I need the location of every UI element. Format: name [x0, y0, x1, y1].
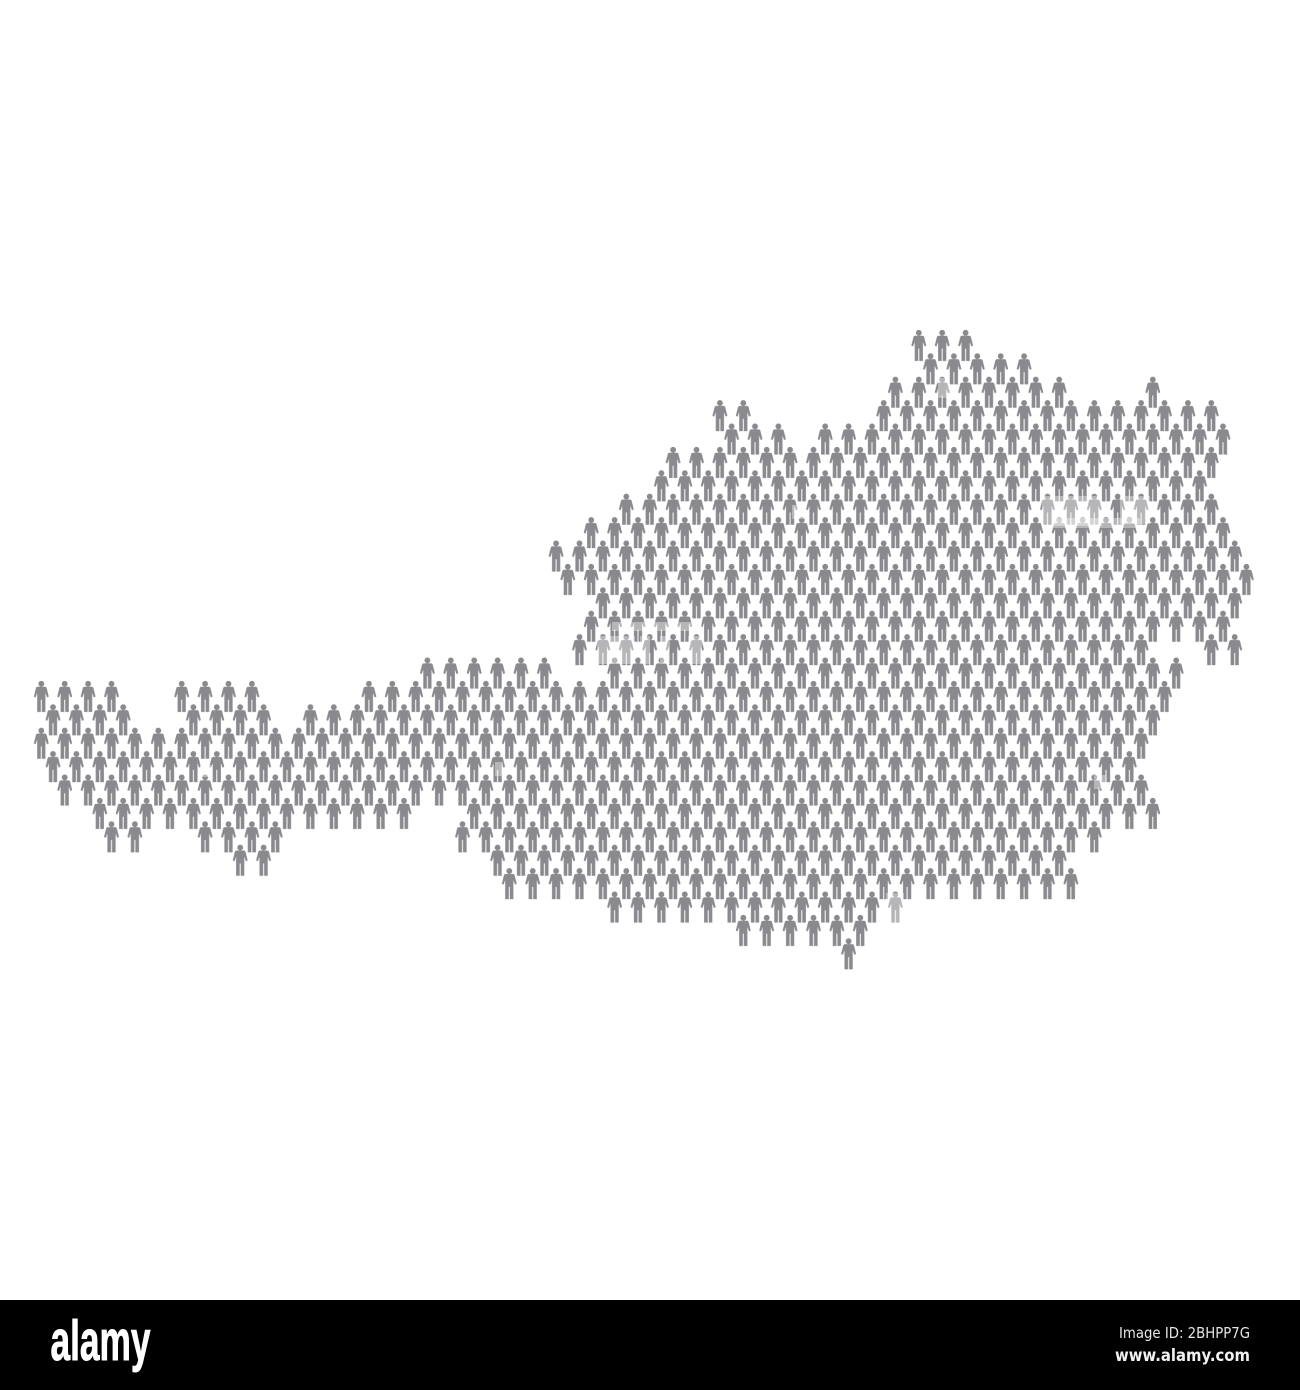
logo: alamy: alamy	[50, 1309, 151, 1373]
map of Austria made of people pictograms	[30, 330, 1258, 970]
image id: Image ID: 2BHPP7G	[1119, 1324, 1250, 1342]
footer bar	[0, 1300, 1300, 1390]
website: www.alamy.com	[1115, 1346, 1250, 1366]
